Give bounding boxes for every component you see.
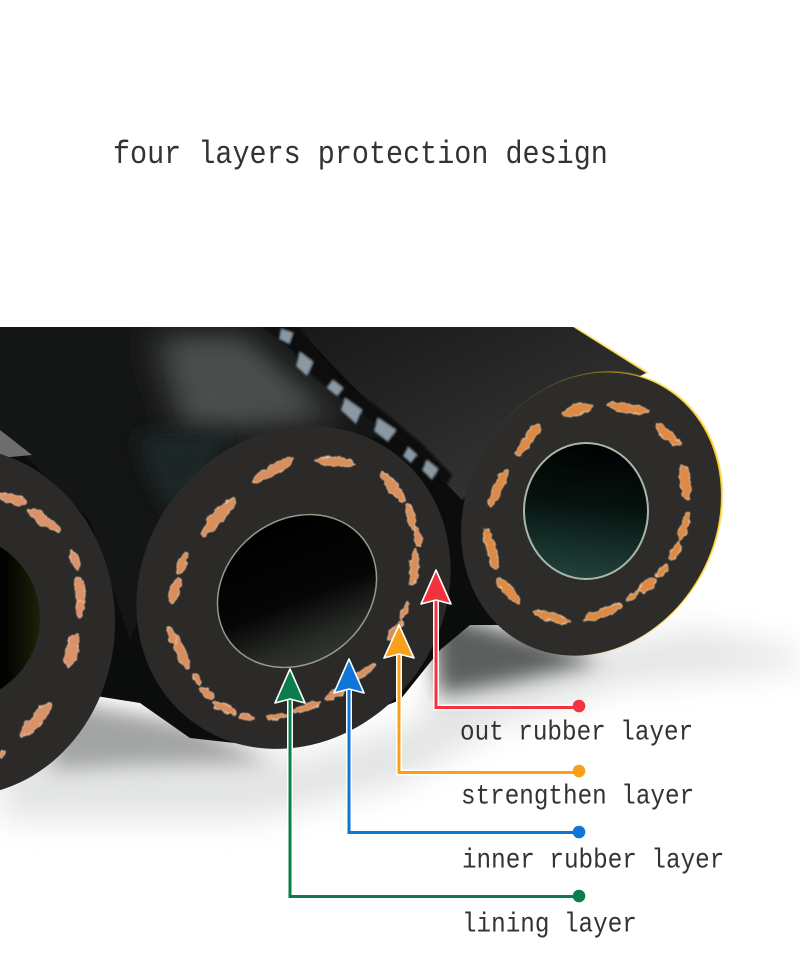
yellow edge of right hose [573,327,647,373]
label: inner rubber layer: inner rubber layer [462,844,724,876]
right hose body [296,327,646,500]
left hose end [0,448,115,796]
bore [523,442,649,580]
arrow: inner rubber layer (blue) [334,659,585,838]
highlight on middle hose [150,335,345,432]
label: strengthen layer: strengthen layer [461,780,694,812]
right hose end [461,370,724,656]
arrow: out rubber layer (red) [421,570,585,712]
floor shadow [0,610,800,820]
yellow rim [493,370,724,656]
stitching [0,491,86,759]
stitching [481,400,692,626]
arrow: strengthen layer (orange) [384,625,585,777]
arrow: lining layer (green) [275,669,585,902]
face [0,448,115,796]
teal reflection [135,430,225,515]
bore [0,547,40,690]
middle hose end [136,426,450,749]
hose bodies [0,327,647,748]
left part of middle hose [0,327,400,640]
label: out rubber layer: out rubber layer [460,716,693,748]
label: lining layer: lining layer [462,908,637,940]
bore [216,514,378,668]
face [461,372,721,656]
hose photograph [0,327,798,829]
printed lettering on hose [278,327,452,486]
stitching [166,454,423,722]
left hose sliver [0,430,32,458]
title: four layers protection design [113,138,608,174]
face [136,426,450,749]
